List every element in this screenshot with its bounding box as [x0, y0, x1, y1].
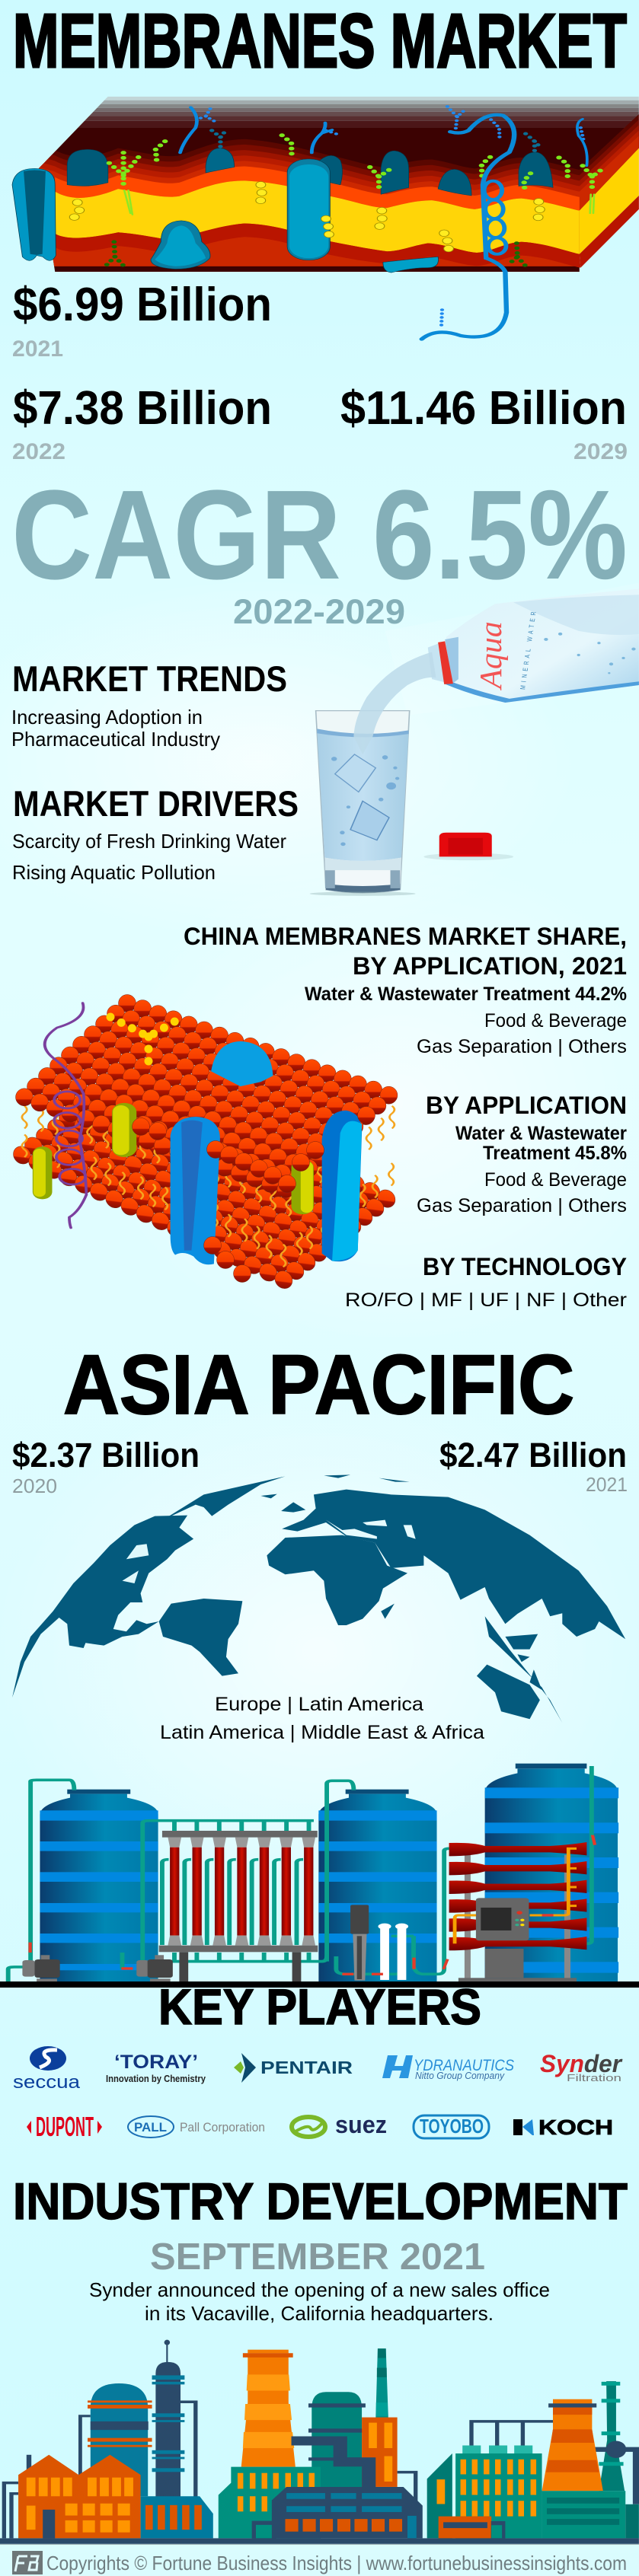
illustration: industrial skyline — [0, 2340, 639, 2544]
stat: 2029 market size: $11.46 Billion — [340, 382, 627, 435]
text block: market drivers: Scarcity of Fresh Drinking Water — [12, 830, 286, 853]
logo: Toray — [106, 2052, 206, 2084]
world map globe — [12, 1475, 625, 1723]
skyline ground — [0, 2538, 639, 2544]
white filter housings — [378, 1924, 408, 1980]
illustration: water treatment plant — [8, 1764, 618, 1981]
panel: by application — [417, 1092, 627, 1216]
heading: key players: KEY PLAYERS — [158, 1978, 481, 2035]
text block: market trends: MARKET TRENDS — [12, 658, 287, 699]
panel: by application: Food & Beverage — [484, 1169, 627, 1191]
other regions: Europe | Latin America — [215, 1694, 423, 1715]
logo: seccua — [13, 2046, 81, 2093]
stat: Asia Pacific 2020: 2020 — [12, 1475, 57, 1497]
stat: Asia Pacific 2021: 2021 — [586, 1473, 628, 1496]
stat: 2029 market size: 2029 — [574, 439, 628, 464]
bottle — [428, 589, 639, 703]
Fortune Business Insights logo — [12, 2551, 43, 2574]
membrane filter rack — [159, 1831, 318, 1981]
stat: Asia Pacific 2021 — [439, 1436, 628, 1496]
lipid tails — [22, 1106, 395, 1267]
stat: 2021 market size — [12, 279, 272, 362]
panel: China market share by application: Food & Beverage — [484, 1010, 627, 1031]
logo: Suez: suez — [335, 2111, 387, 2138]
text block: market trends: Increasing Adoption in — [11, 706, 203, 728]
CAGR callout: 2022-2029 — [233, 592, 405, 631]
red valves — [28, 1835, 596, 1975]
stat: 2022 market size — [12, 382, 272, 464]
glass of water with ice — [310, 711, 416, 896]
text block: market trends: Pharmaceutical Industry — [11, 728, 220, 751]
middle factory cluster — [219, 2348, 423, 2538]
illustration: bottle pouring water into glass — [310, 583, 639, 896]
logo: seccua: seccua — [13, 2072, 81, 2093]
cholesterol hexagon chains — [74, 185, 540, 251]
stat: 2021 market size: 2021 — [12, 336, 63, 362]
logo: Pall Corporation: PALL — [134, 2120, 167, 2134]
red bottle cap — [423, 833, 513, 860]
logo: Suez — [292, 2111, 387, 2138]
stat: 2022 market size: $7.38 Billion — [13, 382, 272, 435]
heading: Asia Pacific: ASIA PACIFIC — [63, 1338, 574, 1432]
ground line — [0, 1981, 639, 1988]
panel: by application: Water & Wastewater — [455, 1123, 627, 1144]
logo: Hydranautics: Nitto Group Company — [415, 2070, 505, 2081]
text block: market drivers: Rising Aquatic Pollution — [12, 861, 216, 884]
left tank — [40, 1790, 158, 1981]
logo: Koch — [513, 2115, 613, 2139]
membrane proteins — [12, 148, 553, 273]
panel: by technology: RO/FO | MF | UF | NF | Other — [345, 1290, 627, 1311]
panel: by application: BY APPLICATION — [426, 1092, 627, 1119]
panel: by application: Gas Separation | Others — [417, 1195, 627, 1216]
glycan chains and helix — [105, 106, 603, 340]
development description: Synder announced the opening of a new sales office — [89, 2278, 550, 2301]
logo: DuPont: DUPONT — [36, 2111, 94, 2142]
text block: market drivers — [12, 783, 299, 884]
left factory cluster — [4, 2340, 213, 2538]
footer: copyright — [0, 2544, 639, 2576]
right factory cluster — [427, 2381, 639, 2538]
water stream — [353, 652, 436, 754]
text block: market trends — [11, 658, 287, 751]
right tall tank — [485, 1764, 618, 1981]
development description: in its Vacaville, California headquarters. — [145, 2302, 494, 2325]
panel: China market share by application: CHINA MEMBRANES MARKET SHARE, — [184, 923, 627, 950]
illustration: cell membrane cross-section — [12, 97, 639, 340]
logo: Toray: ‘TORAY’ — [114, 2052, 198, 2073]
bottle: Aqua — [473, 621, 508, 690]
purple helix protein — [45, 1003, 86, 1228]
stat: Asia Pacific 2020 — [12, 1436, 200, 1497]
logo: Pentair: PENTAIR — [260, 2058, 353, 2077]
logo: Toyobo: TOYOBO — [420, 2115, 484, 2138]
logo: Hydranautics — [382, 2055, 514, 2081]
bottle: MINERAL WATER — [519, 611, 538, 690]
stat: Asia Pacific 2021: $2.47 Billion — [439, 1436, 627, 1475]
blue transmembrane proteins and capsules — [33, 1041, 362, 1264]
logo: Pall Corporation: Pall Corporation — [180, 2120, 265, 2134]
panel: China market share by application: BY APPLICATION, 2021 — [353, 952, 627, 980]
panel: China market share by application: Water & Wastewater Treatment 44.2% — [305, 984, 627, 1005]
teal pipes — [8, 1766, 592, 1981]
panel: by technology: BY TECHNOLOGY — [423, 1253, 627, 1280]
other regions — [160, 1694, 484, 1743]
logo: Pall Corporation — [128, 2116, 265, 2138]
logo: Hydranautics: YDRANAUTICS — [414, 2057, 514, 2074]
stat: Asia Pacific 2020: $2.37 Billion — [12, 1436, 200, 1475]
stat: 2021 market size: $6.99 Billion — [13, 279, 272, 331]
yellow antigen — [110, 1015, 185, 1063]
logo: Toray: Innovation by Chemistry — [106, 2073, 206, 2084]
logo: Synder Filtration: Synder — [540, 2050, 623, 2077]
development description — [89, 2278, 550, 2325]
other regions: Latin America | Middle East & Africa — [160, 1722, 484, 1743]
logo: Synder Filtration: Filtration — [567, 2072, 621, 2083]
middle tank — [318, 1790, 437, 1981]
text block: market drivers: MARKET DRIVERS — [13, 783, 299, 824]
illustration: 3D lipid bilayer model — [14, 994, 398, 1302]
front lipid heads over proteins — [133, 1107, 375, 1282]
bottom lipid sheet — [14, 1051, 395, 1302]
reverse osmosis unit — [449, 1842, 586, 1981]
date: SEPTEMBER 2021 — [150, 2236, 485, 2278]
top lipid sheet — [15, 994, 398, 1198]
logo: Pentair — [234, 2053, 353, 2083]
panel: by application: Treatment 45.8% — [483, 1143, 627, 1164]
stat: 2029 market size — [340, 382, 628, 464]
panel: China market share by application: Gas Separation | Others — [417, 1036, 627, 1057]
logo: Koch: KOCH — [538, 2115, 613, 2139]
pumps — [22, 1905, 369, 1981]
panel: by technology — [345, 1253, 627, 1311]
panel: China market share by application — [184, 923, 627, 1057]
logo: DuPont — [27, 2111, 102, 2142]
stat: 2022 market size: 2022 — [12, 439, 65, 464]
